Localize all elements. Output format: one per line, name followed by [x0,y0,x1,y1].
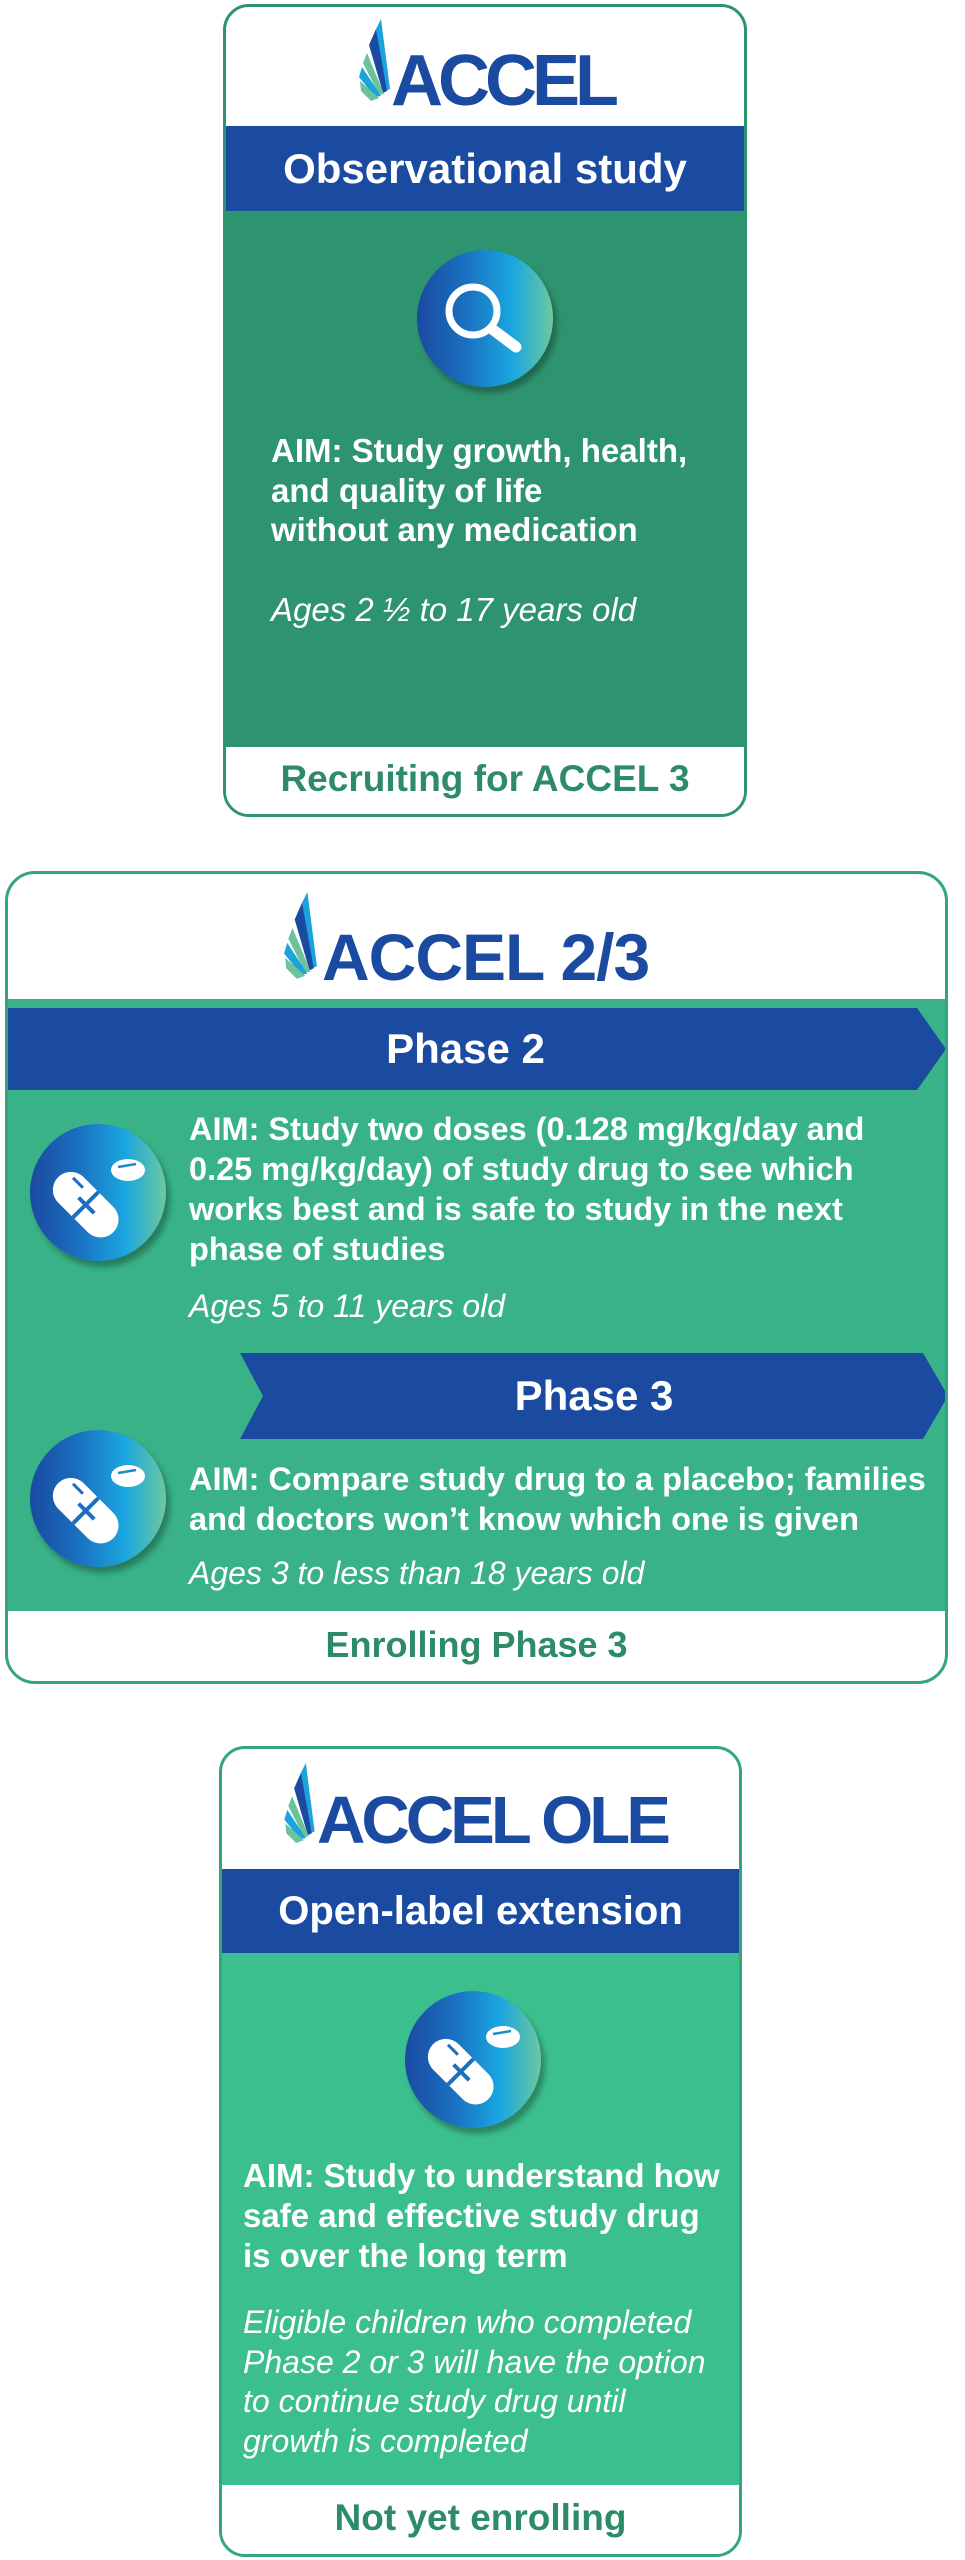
heading: Open-label extension [222,1869,739,1953]
text: eligibility: to continue study drug until [243,2383,625,2419]
text: eligibility: Eligible children who completed [243,2304,691,2340]
heading: Observational study: Observational study [283,145,687,192]
text: phase 2 aim: 0.25 mg/kg/day) of study drug to see which [189,1151,854,1187]
header white [8,874,945,999]
text: aim: safe and effective study drug [243,2197,700,2234]
logo: ACCEL OLE: ACCEL OLE [317,1783,667,1858]
arrow bar: Phase 3 [240,1353,948,1439]
text: phase 3 aim [189,1461,926,1537]
arrow bar: Phase 2: Phase 2 [386,1025,545,1072]
text: eligibility: growth is completed [243,2423,528,2459]
icon: wing [284,892,317,979]
icon: pills [405,1991,541,2128]
text: aim: is over the long term [243,2237,568,2274]
text: aim: without any medication [271,511,638,548]
footer: status: Recruiting for ACCEL 3 [280,758,690,799]
card: ACCEL OLE [219,1746,742,2557]
text: aim: AIM: Study to understand how [243,2157,720,2194]
text: phase 2 aim: phase of studies [189,1231,445,1267]
text: phase 2 ages: Ages 5 to 11 years old [189,1288,505,1324]
logo: ACCEL 2/3 [284,892,649,994]
text: phase 2 aim [188,1111,864,1267]
text: aim [243,2157,720,2274]
icon: wing [284,1763,315,1843]
panel body [226,211,744,747]
heading: Observational study [226,126,744,211]
text: phase 2 aim: AIM: Study two doses (0.128 mg/kg/day and [189,1111,864,1147]
logo: ACCEL: ACCEL [391,41,614,121]
footer: status [226,747,744,814]
card: ACCEL observational study [223,4,747,817]
text: phase 3 ages: Ages 3 to less than 18 years old [189,1555,644,1591]
text: phase 2 aim: works best and is safe to study in the next [189,1191,843,1227]
logo: ACCEL 2/3: ACCEL 2/3 [322,920,649,994]
text: eligibility: Phase 2 or 3 will have the option [243,2344,706,2380]
footer: status [222,2485,739,2554]
card: ACCEL 2/3 [5,871,948,1684]
text: phase 3 aim: AIM: Compare study drug to a placebo; families [189,1461,926,1497]
footer: status: Not yet enrolling [335,2497,626,2538]
arrow bar: Phase 2 [5,1008,946,1090]
footer: status: Enrolling Phase 3 [325,1624,628,1665]
footer: status [8,1611,945,1681]
text: eligibility [243,2304,706,2459]
heading: Open-label extension: Open-label extension [278,1889,683,1933]
text: ages: Ages 2 ½ to 17 years old [271,591,636,628]
icon: pills phase 2 [30,1124,166,1261]
text: aim: AIM: Study growth, health, [271,432,687,469]
arrow bar: Phase 3: Phase 3 [515,1372,673,1419]
text: aim [270,432,687,548]
icon: magnifier [417,250,553,387]
panel body [222,1953,739,2488]
icon: pills phase 3 [30,1430,166,1567]
text: phase 3 aim: and doctors won’t know which one is given [189,1501,859,1537]
text: aim: and quality of life [271,472,542,508]
icon: wing [359,19,390,101]
logo: ACCEL [359,19,617,121]
